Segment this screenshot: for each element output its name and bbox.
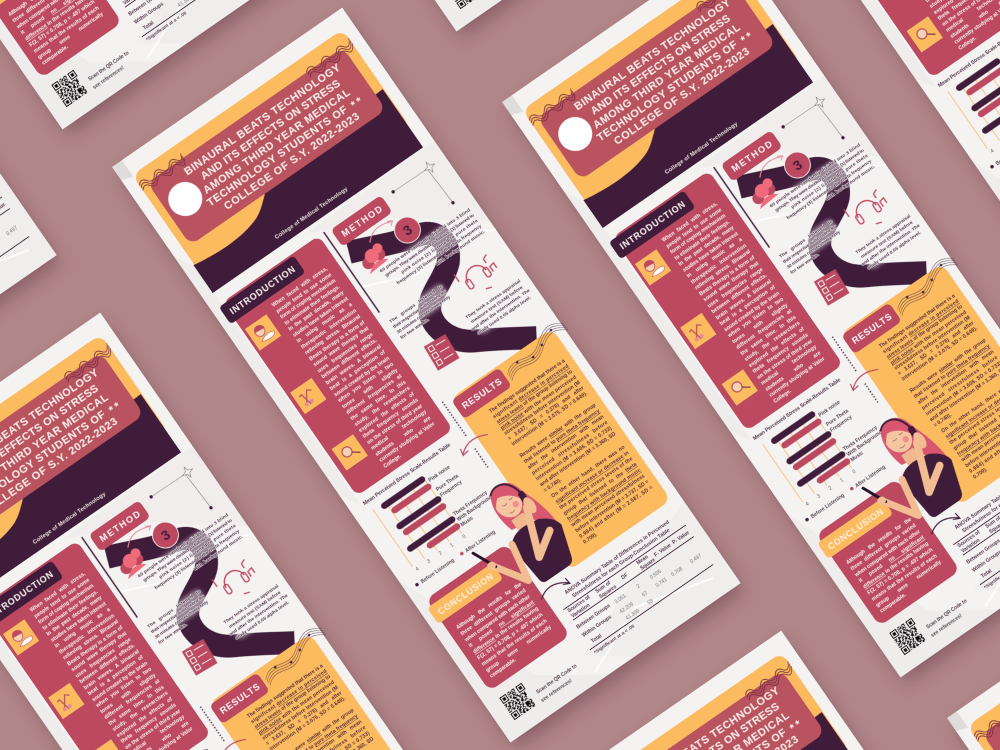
qr caption: see references! [540,678,574,704]
conclusion text: group were numerically [485,624,553,674]
method text 3: and after the intervention. The [470,288,531,333]
heading: results: RESULTS [460,377,504,411]
intro text: explored the effects of [358,391,416,434]
poster: top left copy [0,0,299,136]
conclusion text: F(2, 57) = 0.708, p = .497 which [477,612,544,661]
table: anova summary: 59 [647,598,655,606]
method text 1: pink noise (2) listened to pure theta [400,218,479,275]
poster: main centre [112,6,747,749]
poster: bottom right copy [947,557,1000,750]
results text: = 3.637, SD = 0.376) and after [507,385,585,442]
table: anova summary: 0.505 [649,569,663,581]
method text 2 [388,283,456,341]
college name: College of Medical Technology [274,186,350,241]
table: anova summary: P- Value [671,530,691,546]
intro text: uses frequencies range [317,332,374,374]
intro text: theta frequency sounds [362,397,420,440]
title: AND ITS EFFECTS ON STRESS [199,78,343,183]
table: anova summary: Total [590,633,604,645]
table: anova summary: ANOVA Summary Table of Differences in Perceived [564,520,671,596]
intro text: sound created by the brain [333,356,391,398]
icon: music notes [290,378,326,414]
logo circle [162,175,209,223]
icon: magnifier [332,434,368,470]
table: anova summary: DF [620,573,629,581]
paper sheet [112,8,741,743]
intro text: the same time. In this [350,379,407,422]
arrow: conclusion to table [538,576,570,602]
results text: and after intervention (M = 3.360, SD [539,431,617,488]
method text 1: with background music. [434,228,487,268]
table: anova summary: Between Groups [576,603,612,631]
intro text: therapeutic intervention [300,308,358,350]
title: AMONG THIRD YEAR MEDICAL [201,86,353,197]
intro text: beat is a perception of [329,349,387,392]
chart: perceived stress scale: 1 [449,542,455,549]
intro text: When faced with stress, [271,266,329,309]
table: anova summary: *Significant at a < .05 [593,623,636,656]
conclusion text: comparable. [489,657,518,680]
text halo [361,207,533,374]
poster: right copy [502,0,1000,684]
icon: number three: 3 [400,221,415,239]
poster: bottom copy [551,629,1000,750]
method text 3: They took a stress appraisal [465,278,523,321]
intro text: In the past decade, many [288,290,345,332]
title: BINAURAL BEATS TECHNOLOGY [182,61,343,178]
heading: results [451,367,512,419]
heading: introduction: INTRODUCTION [228,264,297,316]
method text 1: frequency (3) listened to the theta frequency [396,223,483,286]
results text: = 0.740). [543,477,563,494]
table: anova summary: Variation [570,603,591,620]
results text: stressfulness before intervention (M [503,380,582,437]
results text: On the other hand, there was no [551,445,626,500]
results text: Results were similar with the group [519,403,597,459]
intro text: Beats therapy is a form of [308,320,366,362]
poster: left copy [0,311,505,750]
method text 1 [379,207,487,296]
intro text: medical technology [370,409,428,452]
intro text [270,266,441,470]
table: anova summary: Mean [636,554,650,566]
dotted divider [442,402,488,467]
table: anova summary [554,513,718,657]
intro text: tones with slightly [341,367,399,410]
method text 1: 60 people were randomly divided into 3 blind [379,207,472,274]
chart: perceived stress scale: 2 [438,550,444,557]
table: anova summary: 0.741 [655,577,669,589]
panel: introduction [218,235,453,500]
table: anova summary: Squares [598,584,618,600]
table: anova summary: Streesfulness for each Group-Conclusion Table [571,528,671,599]
chart: perceived stress scale: 4 [415,566,421,573]
table: anova summary: F- Value [653,543,673,559]
conclusion text: three different groups varied [460,588,527,637]
chart: perceived stress scale: 0 [462,534,467,540]
poster: top middle copy [58,0,693,38]
squiggle decorations [138,37,356,195]
intro text: form of coping mechanism [279,278,337,321]
title [182,61,372,220]
heading: conclusion: CONCLUSION [436,572,495,617]
chart legend [414,529,497,589]
conclusion text: it posed no significant [468,600,536,649]
icon: stressed person [245,314,281,351]
chart: perceived stress scale: Pure Theta [435,473,460,493]
qr caption: Scan the QR Code to [535,663,578,696]
intro text: different frequencies at [345,373,403,416]
intro text: when you listen to two [336,362,395,405]
intro text: relieving stress. Binaural [304,314,362,356]
intro text: people tend to use some [275,272,333,315]
method text 3 [463,277,535,338]
method text 1: groups. They were divided as follows: (1) listened to [384,213,475,279]
heading: introduction [219,255,306,324]
header banner [131,29,424,293]
results text: significant increase or decrease in [554,450,630,505]
method text 3: study used 0.05 alpha level. [476,294,533,336]
poster: top right copy [687,0,1000,331]
intro text: College. [383,453,403,470]
chart: perceived stress scale: Music [460,515,475,528]
intro text: on the stress of third year [366,403,424,446]
table: anova summary: 0.497 [689,553,703,565]
heading: conclusion [427,563,503,624]
results text: pink noise with the mean perceived [500,374,578,431]
table: anova summary: Square [639,557,657,572]
results text: intervention (M = 3.075, SD = 0.649). [511,390,590,448]
arrow: results to chart [459,431,490,455]
chart: perceived stress scale: 3 [426,558,432,565]
intro text: currently studying at Valor [378,421,436,464]
table: anova summary: 3.051 [614,593,628,605]
title: ** [349,95,365,111]
results text: group that listened to the theta [562,462,638,517]
chart: perceived stress scale: Theta Frequency [452,490,489,518]
chart: perceived stress scale: Mean Perceived Stress Scale-Results Table [362,442,452,507]
qr code [499,683,536,720]
chart: perceived stress scale [359,440,511,589]
table: anova summary: Sum of [595,580,612,595]
winding path [349,192,537,398]
method text 2: their respective audio online for [392,289,448,330]
divider line [324,232,379,313]
illustration: girl with headphones and phone [449,468,583,607]
results text: 0.984) and after (M = 2.587, SD = [578,485,654,540]
chart legend: After Listening [464,529,497,554]
panel: conclusion [423,543,570,694]
conclusion text: means that the results of each [481,618,548,668]
icon: headphones and notes [454,252,504,301]
conclusion text [455,582,557,680]
results text: before intervention (M = 3.737, SD = [574,479,650,534]
phone [473,547,496,573]
results text: 0.709). [582,531,599,546]
title: COLLEGE OF S.Y. 2022-2023 [222,111,362,213]
intro text: between different effects. [321,337,379,380]
table: anova summary: 57 [641,590,649,599]
qr caption [535,663,584,704]
icon: number three [389,212,426,248]
chart: perceived stress scale: With Background [456,495,493,523]
heading: method: METHOD [340,204,384,239]
heading: method [331,195,393,247]
results text [488,358,659,547]
results text: perceived stressfulness before [531,420,609,477]
panel: method [327,156,554,401]
table: anova summary: Within Groups [581,614,613,639]
conclusion text: difference in the results having [472,606,540,655]
results text: after the intervention with mean [527,414,605,471]
poster: far left copy [0,0,63,421]
conclusion text: when compared with each other [463,594,531,644]
chart: perceived stress scale: Pink noise [428,464,452,484]
method text 2: 30 minutes consecutively only [396,294,452,336]
intro text: to eliminate their feelings. [284,284,342,327]
intro text: brain waves. A binaural [325,343,383,386]
results text: The findings suggested that there is a [488,358,567,415]
panel: results [448,318,681,571]
icon: group of people with arrow [350,218,410,275]
results text: the perceived stress levels of the [558,456,634,511]
title: TECHNOLOGY STUDENTS OF [205,104,350,209]
constellation decoration [389,159,460,230]
intro text: study, the researchers [354,385,411,428]
table: anova summary: Sources of [567,594,592,614]
intro text: students who are [374,415,432,458]
method text 2: The groups listened to [388,284,444,325]
chart: perceived stress scale: Frequency [439,479,464,499]
icon: music staff [498,318,574,381]
conclusion text: Although the results for the [455,582,523,631]
icon: checklist [424,334,460,371]
results text: with mean perceived stressfulness [570,473,646,529]
results text: stress levels of the group listening to [496,369,574,426]
table: anova summary: 0.708 [670,566,684,578]
intro text: sound wave therapy that [312,326,370,368]
results text: intervention (M = 3.606, SD = 0.733) [535,425,613,482]
method text 2: for two weeks. [399,316,431,341]
method text 3: measure test (SAM) before [470,285,524,325]
results text: frequency with background music [566,467,642,523]
intro text: studies have taken interest [292,296,350,339]
intro text: in using music as a [296,302,354,344]
table: anova summary: 43.309 [625,608,641,622]
table: anova summary: 42.209 [619,601,635,615]
results text: that listened to pure theta frequency [523,408,601,465]
table: anova summary: 2 [636,583,642,590]
results text: significant decrease in perceived [492,364,570,420]
chart legend: Before Listening [420,558,456,585]
